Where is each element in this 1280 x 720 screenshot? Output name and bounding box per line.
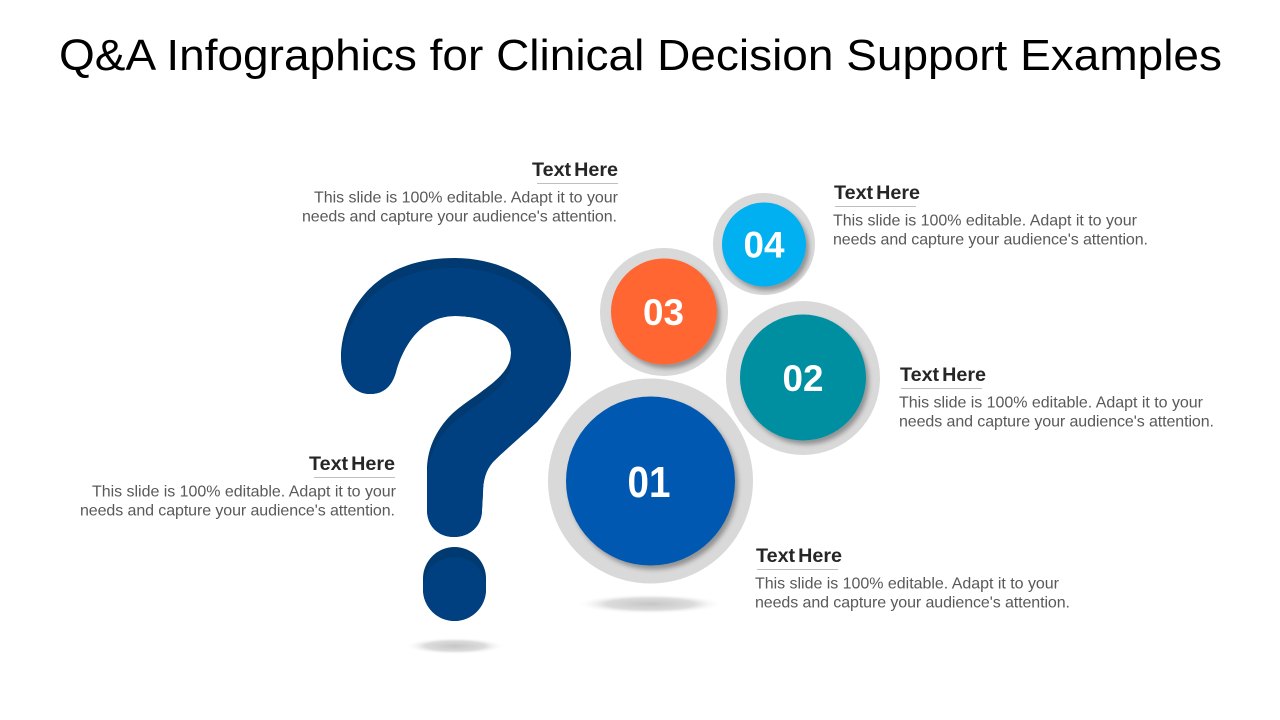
circle 04: 04 bbox=[744, 224, 785, 266]
text block: top left: This slide is 100% editable. Adapt it to your bbox=[314, 190, 619, 206]
text block: bottom right bbox=[755, 545, 1070, 612]
text block: top right bbox=[833, 182, 1148, 248]
circle 03: 03 bbox=[643, 292, 684, 333]
circle 03 bbox=[600, 248, 728, 376]
circle 01: 01 bbox=[628, 458, 670, 507]
question mark dot bbox=[423, 547, 486, 621]
text block: top left bbox=[302, 159, 619, 226]
text block: left: This slide is 100% editable. Adapt it to your bbox=[92, 484, 397, 500]
circle 02: 02 bbox=[782, 358, 824, 399]
text block: left: Text Here bbox=[309, 453, 395, 475]
text block: bottom right: needs and capture your audience's attention. bbox=[755, 594, 1070, 612]
question mark shadow bbox=[405, 638, 505, 654]
text block: left bbox=[80, 453, 397, 520]
circle 01 ground shadow bbox=[576, 594, 724, 614]
icon: question mark bbox=[341, 258, 571, 653]
text block: bottom right: This slide is 100% editable. Adapt it to your bbox=[755, 576, 1060, 592]
text block: middle right bbox=[899, 364, 1214, 430]
text block: middle right: This slide is 100% editable. Adapt it to your bbox=[899, 394, 1204, 412]
text block: top left: needs and capture your audience's attention. bbox=[302, 208, 617, 226]
title: Q&A Infographics for Clinical Decision Support Examples bbox=[59, 31, 1222, 80]
text block: left: needs and capture your audience's attention. bbox=[80, 502, 395, 520]
text block: top left: Text Here bbox=[532, 159, 618, 181]
text block: bottom right: Text Here bbox=[756, 545, 842, 567]
text block: middle right: needs and capture your audience's attention. bbox=[899, 414, 1214, 430]
circle 01 bbox=[548, 378, 753, 614]
text block: top right: This slide is 100% editable. Adapt it to your bbox=[833, 212, 1138, 230]
text block: middle right: Text Here bbox=[900, 364, 986, 386]
circle 04 bbox=[713, 193, 815, 295]
circle 02 bbox=[726, 301, 880, 455]
text block: top right: needs and capture your audience's attention. bbox=[833, 232, 1148, 248]
text block: top right: Text Here bbox=[834, 182, 920, 204]
question mark hook bbox=[341, 258, 571, 537]
